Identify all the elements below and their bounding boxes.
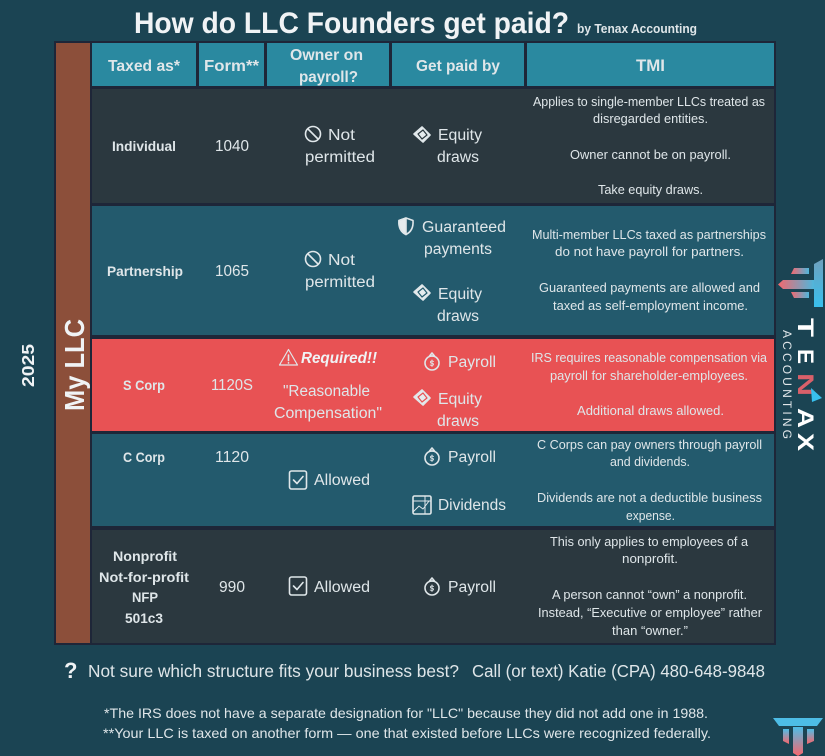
header row (92, 43, 774, 86)
logo wordmark: N (793, 373, 818, 396)
call to action: ? (64, 658, 77, 683)
table frame (54, 41, 776, 645)
TMI text: Applies to single-member LLCs treated as (533, 95, 765, 109)
row: C Corp: Dividends (438, 497, 506, 514)
TMI text: taxed as self-employment income. (553, 299, 748, 313)
logo: bottom corner mark (773, 718, 823, 756)
TMI text: disregarded entities. (593, 112, 708, 126)
row: C Corp (92, 434, 774, 526)
row: S Corp: Payroll (448, 354, 496, 371)
logo wordmark: T (793, 318, 818, 338)
row: Partnership: payments (424, 241, 492, 258)
row: S Corp: Compensation" (274, 405, 382, 422)
row: C Corp: Allowed (314, 472, 370, 489)
header row: Get paid by (416, 58, 500, 75)
TMI text: expense. (626, 509, 675, 523)
icon: shield (399, 218, 413, 234)
TMI text: A person cannot “own” a nonprofit. (552, 588, 747, 602)
footnotes (103, 705, 711, 741)
icon: equity draws (414, 390, 430, 405)
TMI text: Dividends are not a deductible business (537, 491, 762, 505)
row: Partnership: 1065 (215, 263, 249, 280)
row: Partnership: draws (437, 308, 479, 325)
TMI text (537, 438, 762, 523)
header row: Owner on (290, 47, 363, 64)
logo tagline: ACCOUNTING (780, 330, 794, 439)
row: C Corp: Payroll (448, 449, 496, 466)
row: S Corp: Required!! (301, 350, 377, 367)
footnotes: *The IRS does not have a separate designation for "LLC" because they did not add one in 1988. (104, 705, 708, 721)
icon: not permitted (306, 126, 320, 142)
logo wordmark (793, 318, 822, 451)
TMI text: Additional draws allowed. (577, 404, 724, 418)
TMI text (531, 351, 767, 418)
icon: warning (280, 350, 298, 365)
TMI text (532, 228, 766, 313)
row: Nonprofit: 501c3 (125, 610, 163, 626)
icon: equity draws (414, 127, 430, 142)
icon: dividends chart (413, 496, 431, 514)
row: S Corp: Equity (438, 391, 482, 408)
call to action: Not sure which structure fits your business best? (88, 661, 459, 681)
row: Individual: 1040 (215, 138, 249, 155)
row: Nonprofit: NFP (132, 589, 158, 605)
row: Partnership: Partnership (107, 263, 183, 279)
icon: money bag (425, 448, 439, 465)
TMI text: IRS requires reasonable compensation via (531, 351, 767, 365)
row: Nonprofit: 990 (219, 579, 245, 596)
row: Partnership (92, 206, 774, 335)
logo wordmark: A (793, 408, 818, 428)
row: S Corp: draws (437, 413, 479, 430)
call to action: Call (or text) Katie (CPA) 480-648-9848 (472, 661, 765, 681)
icon: checkbox (290, 471, 306, 489)
row: Partnership: Guaranteed (422, 219, 506, 236)
footnotes: **Your LLC is taxed on another form — one that existed before LLCs were recognized federally. (103, 725, 711, 741)
icon: checkbox (290, 577, 306, 595)
row: C Corp: 1120 (215, 449, 249, 466)
TMI text: payroll for shareholder-employees. (550, 369, 748, 383)
TMI text: do not have payroll for partners. (555, 245, 744, 259)
row: Partnership: permitted (305, 274, 375, 291)
logo mark (778, 259, 823, 307)
row: Individual: Not (328, 127, 356, 144)
TMI text: Multi-member LLCs taxed as partnerships (532, 228, 766, 242)
row: Individual: Equity (438, 127, 482, 144)
call to action (64, 658, 765, 683)
icon: equity draws (414, 285, 430, 300)
row: Nonprofit: Allowed (314, 579, 370, 596)
TMI text: Guaranteed payments are allowed and (539, 281, 760, 295)
TMI text (538, 535, 762, 638)
title: How do LLC Founders get paid? (134, 7, 569, 40)
panel: My LLC sidebar: My LLC (59, 319, 90, 411)
panel: My LLC sidebar (56, 43, 90, 643)
row: Nonprofit: Not-for-profit (99, 569, 189, 585)
row: C Corp: C Corp (123, 449, 165, 465)
row: S Corp: S Corp (123, 377, 165, 393)
header row: TMI (636, 57, 665, 75)
title: by Tenax Accounting (577, 22, 697, 36)
header row: Form** (204, 58, 260, 75)
row: Partnership: Not (328, 252, 356, 269)
TMI text: Instead, “Executive or employee” rather (538, 606, 762, 620)
TMI text: and dividends. (610, 455, 690, 469)
icon: not permitted (306, 252, 320, 266)
icon: money bag (425, 353, 439, 370)
TMI text: Take equity draws. (598, 183, 703, 197)
year label: 2025 (18, 344, 38, 387)
row: S Corp (92, 339, 774, 431)
row: Partnership: Equity (438, 286, 482, 303)
row: Individual: draws (437, 149, 479, 166)
row: S Corp: "Reasonable (283, 383, 370, 400)
TMI text (533, 95, 765, 197)
logo wordmark: E (793, 349, 818, 364)
TMI text: This only applies to employees of a (550, 535, 748, 549)
header row: Taxed as* (108, 58, 181, 75)
TMI text: C Corps can pay owners through payroll (537, 438, 762, 452)
row: Nonprofit: Payroll (448, 579, 496, 596)
row: Individual: Individual (112, 138, 176, 154)
row: S Corp: 1120S (211, 377, 253, 394)
header row: payroll? (299, 69, 358, 86)
row: Individual (92, 89, 774, 203)
row: Individual: permitted (305, 149, 375, 166)
TMI text: than “owner.” (612, 624, 688, 638)
row: Nonprofit: Nonprofit (113, 548, 177, 564)
logo wordmark: X (793, 433, 818, 451)
row: Nonprofit (92, 530, 774, 643)
TMI text: nonprofit. (622, 552, 678, 566)
logo: Tenax vertical (778, 259, 823, 451)
TMI text: Owner cannot be on payroll. (570, 148, 731, 162)
icon: money bag (425, 578, 439, 595)
